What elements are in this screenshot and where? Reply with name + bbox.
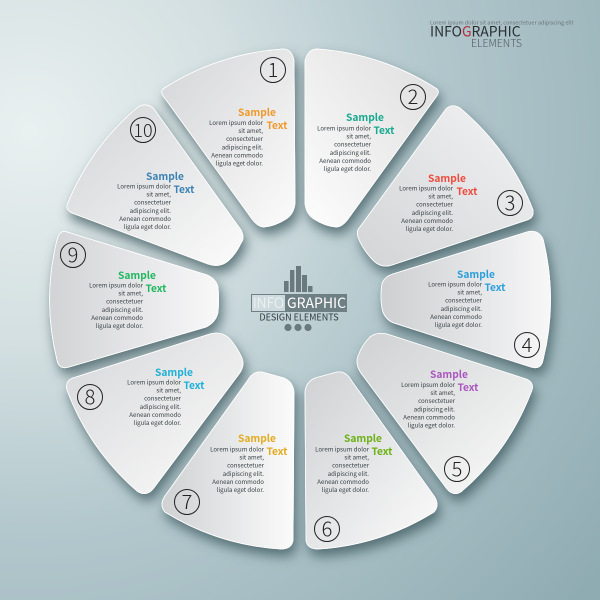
text 5: ligula eget dolor.	[408, 420, 455, 430]
number 1	[260, 54, 286, 83]
number 5	[444, 453, 470, 482]
text 8: Text	[184, 377, 205, 392]
text 2	[317, 109, 395, 173]
number 4	[514, 329, 540, 358]
text 10: Aenean commodo	[119, 214, 171, 223]
text 7: Aenean commodo	[212, 477, 264, 486]
number 10: 10	[133, 117, 153, 143]
text 3: ligula eget dolor.	[406, 224, 453, 233]
text 5: Text	[458, 379, 479, 394]
number 3: 3	[505, 187, 515, 216]
text 9: Text	[146, 280, 167, 295]
text 10: sit amet,	[146, 190, 171, 198]
text 1: consectetuer	[226, 134, 264, 143]
text 5: Lorem ipsum dolor	[401, 380, 456, 389]
header: infographic elements: INFOGRAPHIC	[430, 22, 521, 42]
text 8: sit amet,	[156, 386, 181, 394]
panel 5	[357, 333, 532, 494]
text 4: Text	[485, 279, 506, 294]
text 10: Lorem ipsum dolor	[117, 182, 172, 190]
panel 2	[305, 49, 438, 227]
text 10: adipiscing elit.	[130, 206, 171, 215]
text 6: Sample	[344, 430, 382, 445]
text 10	[117, 168, 195, 231]
text 2: ligula eget dolor.	[324, 164, 371, 173]
text 1: Sample	[238, 104, 276, 119]
text 6: ligula eget dolor.	[322, 485, 369, 494]
text 8: Sample	[155, 364, 193, 379]
text 3: Text	[457, 183, 478, 198]
text 3: sit amet,	[428, 192, 453, 200]
panel 4	[381, 231, 550, 368]
header: infographic elements	[430, 18, 574, 51]
text 9: adipiscing elit.	[102, 305, 143, 314]
text 8: Aenean commodo	[129, 410, 181, 419]
text 8: Lorem ipsum dolor	[127, 378, 182, 386]
number 7	[174, 486, 200, 515]
text 9: Sample	[118, 267, 156, 282]
header: infographic elements: ELEMENTS	[471, 36, 522, 51]
text 1: ligula eget dolor.	[216, 158, 263, 168]
text 7: Sample	[238, 430, 276, 445]
text 5	[401, 366, 479, 430]
text 1: Text	[267, 117, 288, 132]
text 6: Aenean commodo	[317, 477, 369, 486]
icon: bar chart	[284, 266, 312, 292]
text 9: consectetuer	[106, 296, 144, 306]
text 6: sit amet,	[344, 452, 369, 462]
text 8: ligula eget dolor.	[134, 418, 181, 427]
text 10: Text	[174, 181, 195, 196]
number 6: 6	[322, 513, 332, 542]
text 5: Aenean commodo	[403, 412, 455, 422]
text 1	[209, 104, 288, 168]
text 9: ligula eget dolor.	[96, 321, 143, 330]
text 1: Aenean commodo	[211, 150, 263, 160]
text 4: Lorem ipsum dolor	[428, 280, 483, 288]
number 4: 4	[522, 329, 533, 358]
text 6: consectetuer	[332, 460, 370, 470]
panel 1	[162, 49, 295, 227]
panel 6	[305, 372, 437, 549]
text 7: sit amet,	[239, 452, 264, 462]
number 6	[314, 513, 340, 542]
text 4: Sample	[457, 266, 495, 281]
text 2: consectetuer	[334, 140, 372, 148]
text 9: sit amet,	[118, 288, 143, 298]
panel 3	[357, 106, 533, 266]
text 3: Aenean commodo	[401, 216, 453, 225]
text 7	[210, 430, 288, 494]
text 2: Aenean commodo	[319, 156, 371, 165]
text 7: adipiscing elit.	[223, 469, 264, 478]
panel 7	[162, 372, 294, 549]
text 6: adipiscing elit.	[328, 469, 369, 478]
dots	[284, 324, 312, 331]
number 1: 1	[268, 54, 278, 83]
text 1: sit amet,	[238, 126, 263, 135]
logo wordmark: INFO	[253, 293, 284, 313]
text 3: adipiscing elit.	[412, 208, 453, 217]
number 3	[498, 187, 522, 216]
text 1: adipiscing elit.	[222, 142, 263, 152]
text 4: Aenean commodo	[430, 312, 482, 321]
text 6: Text	[372, 443, 393, 458]
text 9	[89, 267, 167, 330]
text 7: ligula eget dolor.	[217, 485, 264, 494]
panel 10	[67, 105, 243, 265]
number 2: 2	[408, 81, 418, 110]
text 5: Sample	[430, 366, 468, 381]
text 3: Sample	[428, 170, 466, 185]
text 3: Lorem ipsum dolor	[399, 184, 454, 192]
text 5: consectetuer	[418, 396, 456, 405]
logo wordmark	[252, 293, 347, 313]
text 4: sit amet,	[457, 288, 482, 296]
logo wordmark: GRAPHIC	[287, 293, 346, 313]
text 10: Sample	[146, 168, 184, 183]
text 4	[428, 266, 506, 329]
text 8: consectetuer	[144, 394, 182, 402]
text 2: Sample	[346, 109, 384, 124]
text 9: Lorem ipsum dolor	[89, 280, 144, 290]
text 9: Aenean commodo	[91, 313, 143, 322]
text 2: Lorem ipsum dolor	[317, 124, 372, 132]
text 4: ligula eget dolor.	[435, 320, 482, 329]
text 3: consectetuer	[416, 200, 454, 208]
text 6: Lorem ipsum dolor	[315, 444, 370, 454]
text 10: consectetuer	[134, 198, 172, 206]
text 7: consectetuer	[227, 460, 265, 470]
panel 9	[50, 231, 219, 368]
text 2: sit amet,	[346, 132, 371, 140]
number 8	[78, 381, 102, 410]
center logo	[252, 266, 347, 331]
text 2: adipiscing elit.	[330, 148, 371, 157]
text 4: adipiscing elit.	[441, 304, 482, 313]
header: infographic elements: Lorem ipsum dolor sit amet, consectetuer adipiscing elit	[430, 18, 574, 26]
number 2	[400, 81, 426, 110]
text 3	[399, 170, 478, 233]
text 5: sit amet,	[430, 388, 455, 397]
number 9	[60, 239, 86, 268]
text 10: ligula eget dolor.	[124, 222, 171, 231]
text 7: Text	[267, 443, 288, 458]
text 4: consectetuer	[445, 296, 483, 304]
number 8: 8	[85, 381, 95, 410]
text 1: Lorem ipsum dolor	[209, 118, 264, 127]
subtitle: DESIGN ELEMENTS	[259, 310, 339, 324]
number 7: 7	[182, 486, 192, 515]
text 6	[315, 430, 393, 494]
text 8	[127, 364, 205, 427]
text 2: Text	[374, 122, 395, 137]
panel 8	[67, 333, 243, 494]
text 8: adipiscing elit.	[140, 402, 181, 411]
text 7: Lorem ipsum dolor	[210, 444, 265, 454]
number 9: 9	[68, 239, 78, 268]
text 5: adipiscing elit.	[414, 404, 455, 414]
number 5: 5	[452, 453, 462, 482]
